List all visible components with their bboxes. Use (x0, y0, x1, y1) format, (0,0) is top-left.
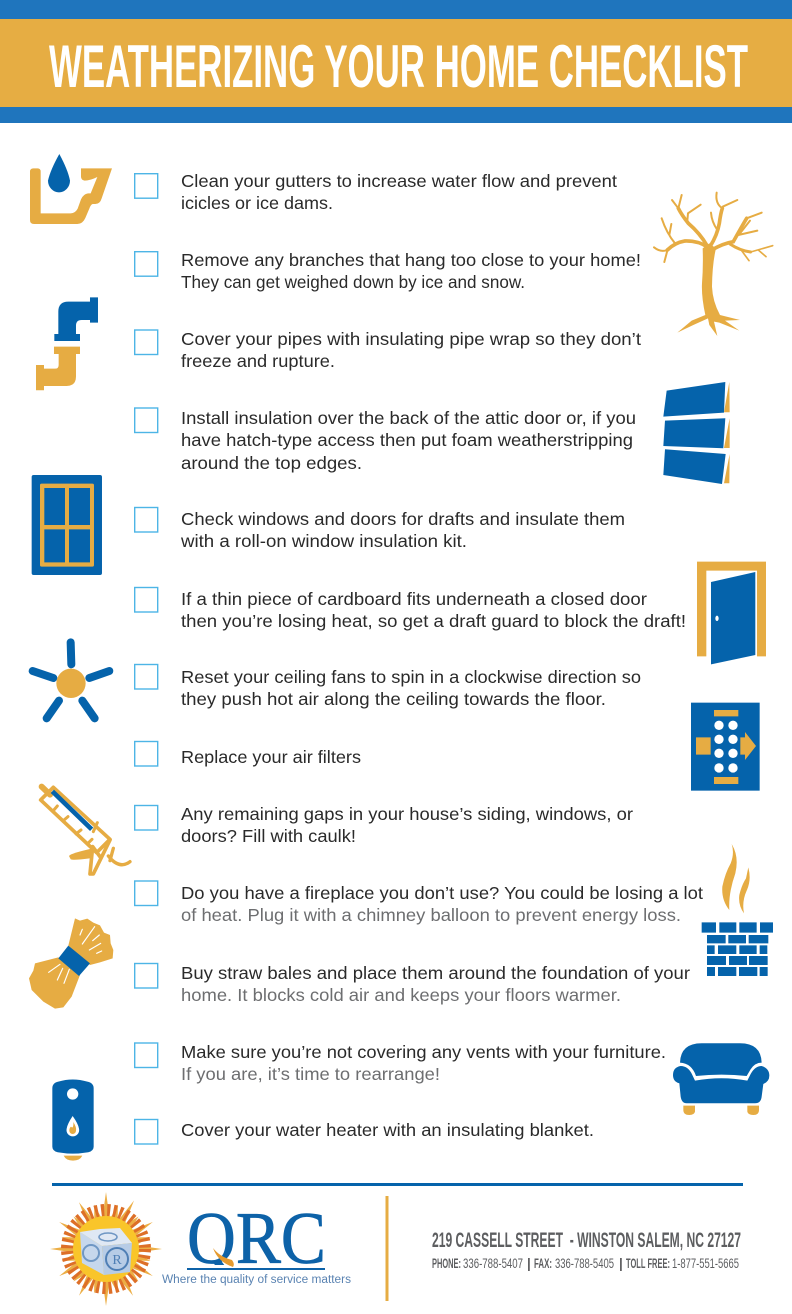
checkbox 13 (135, 1120, 158, 1144)
checkbox 10 (135, 881, 158, 906)
contact: phone numbers (432, 1256, 739, 1271)
checklist item 7 text: Reset your ceiling fans to spin in a clockwise direction so (181, 667, 641, 687)
checklist item 2 text (181, 250, 641, 292)
checklist item 7 text: they push hot air along the ceiling towards the floor. (181, 689, 606, 709)
icon: air filter (691, 703, 760, 791)
checklist item 5 text: with a roll-on window insulation kit. (180, 531, 467, 551)
contact: phone numbers: PHONE: (432, 1256, 461, 1271)
checklist item 9 text: Any remaining gaps in your house’s siding, windows, or (181, 804, 633, 824)
checklist item 1 text: icicles or ice dams. (181, 193, 333, 213)
checkbox 9 (135, 806, 158, 830)
icon: bare tree (654, 193, 773, 336)
checklist item 6 text: then you’re losing heat, so get a draft guard to block the draft! (181, 611, 686, 631)
icon: water heater (52, 1079, 94, 1161)
footer divider (52, 1183, 743, 1186)
contact: phone numbers: | (527, 1256, 531, 1271)
icon: straw bundle (29, 918, 113, 1009)
icon: sofa (673, 1043, 769, 1115)
checklist item 1 text: Clean your gutters to increase water flow and prevent (181, 171, 617, 191)
icon: caulk gun (41, 787, 130, 874)
checklist item 10 text (181, 883, 703, 925)
checklist item 4 text: have hatch-type access then put foam weatherstripping (181, 430, 633, 450)
checklist item 5 text (180, 509, 625, 551)
contact: phone numbers: 336-788-5407 (463, 1256, 523, 1271)
checkbox 7 (135, 664, 158, 689)
checkbox 11 (135, 964, 158, 988)
checklist item 11 text (181, 963, 690, 1005)
checklist item 10 text: Do you have a fireplace you don’t use? You could be losing a lot (181, 883, 703, 903)
checklist item 13 text: Cover your water heater with an insulating blanket. (181, 1120, 594, 1140)
contact: phone numbers: FAX: (534, 1256, 552, 1271)
checkbox 3 (135, 330, 158, 354)
checkbox 12 (135, 1043, 158, 1068)
checklist item 9 text: doors? Fill with caulk! (181, 826, 356, 846)
checklist item 12 text: Make sure you’re not covering any vents with your furniture. (181, 1042, 666, 1062)
checklist item 5 text: Check windows and doors for drafts and insulate them (181, 509, 625, 529)
checkbox 1 (135, 174, 158, 198)
checklist item 12 text (181, 1042, 666, 1084)
icon: ceiling fan (33, 642, 109, 718)
checkbox 4 (135, 408, 158, 432)
checklist item 10 text: of heat. Plug it with a chimney balloon to prevent energy loss. (181, 905, 681, 925)
icon: door (697, 562, 766, 664)
icon: window (32, 475, 102, 575)
checklist item 2 text: They can get weighed down by ice and snow. (181, 272, 525, 292)
checkbox 6 (135, 588, 158, 612)
logo: QRC wordmark: QRC (187, 1198, 326, 1280)
checklist item 11 text: home. It blocks cold air and keeps your floors warmer. (181, 985, 621, 1005)
checklist item 3 text: Cover your pipes with insulating pipe wrap so they don’t (181, 329, 641, 349)
checklist item 11 text: Buy straw bales and place them around the foundation of your (181, 963, 690, 983)
checklist item 1 text (181, 171, 617, 213)
checklist item 2 text: Remove any branches that hang too close to your home! (181, 250, 641, 270)
checklist item 7 text (181, 667, 641, 709)
checklist item 12 text: If you are, it’s time to rearrange! (181, 1064, 440, 1084)
checklist item 8 text: Replace your air filters (181, 747, 361, 767)
checklist item 6 text (181, 589, 686, 631)
contact: phone numbers: 1-877-551-5665 (672, 1256, 739, 1271)
contact: phone numbers: | (619, 1256, 623, 1271)
checklist item 4 text: Install insulation over the back of the attic door or, if you (181, 408, 636, 428)
contact: phone numbers: 336-788-5405 (555, 1256, 614, 1271)
checklist item 4 text: around the top edges. (181, 453, 362, 473)
checkbox 5 (135, 508, 158, 532)
logo: sunburst with ice cube (50, 1192, 162, 1306)
checkbox 2 (135, 252, 158, 276)
checklist item 9 text (181, 804, 633, 846)
checklist item 3 text: freeze and rupture. (181, 351, 335, 371)
checkbox 8 (135, 742, 158, 766)
checklist item 6 text: If a thin piece of cardboard fits underneath a closed door (181, 589, 647, 609)
logo: sunburst with ice cube: R (112, 1253, 122, 1268)
icon: gutter with water drop (30, 154, 112, 224)
icon: attic panels (663, 382, 730, 484)
icon: pipes (36, 297, 98, 390)
icon: chimney with smoke (702, 844, 773, 976)
contact: phone numbers: TOLL FREE: (626, 1256, 670, 1271)
logo tagline: Where the quality of service matters (162, 1274, 351, 1286)
footer vertical divider (386, 1196, 388, 1301)
header banner (0, 0, 792, 123)
checklist item 4 text (181, 408, 636, 473)
checklist item 3 text (181, 329, 641, 371)
